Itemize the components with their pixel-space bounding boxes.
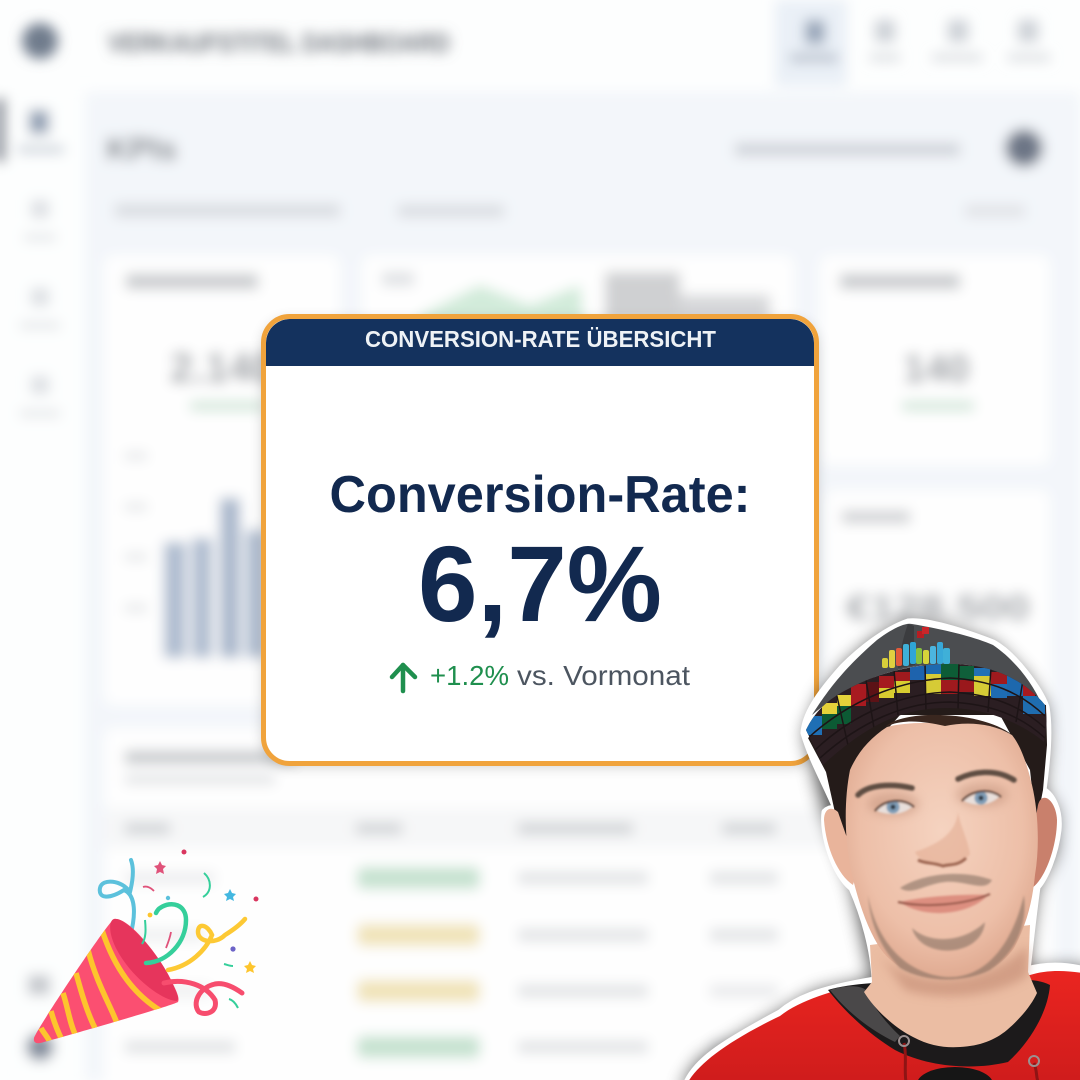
card: conversion-rate overview bbox=[263, 316, 817, 766]
confetti bbox=[142, 850, 258, 1008]
change versus previous month: vs. Vormonat bbox=[517, 660, 690, 691]
nose bbox=[915, 812, 970, 866]
card header bar bbox=[266, 319, 814, 366]
hairline bbox=[885, 715, 1012, 735]
green streamer bbox=[146, 904, 186, 963]
big number: 6,7% bbox=[418, 523, 662, 644]
neck bbox=[864, 925, 1037, 1047]
stubble bbox=[868, 874, 1025, 980]
KPI card: right top: 140 bbox=[903, 347, 970, 391]
brim coloured blocks bbox=[806, 664, 1045, 758]
filter row bbox=[115, 204, 1025, 217]
KPI card: left: 2.140 bbox=[170, 344, 275, 391]
hoodie drawstrings bbox=[904, 1043, 1038, 1080]
ears bbox=[824, 798, 1057, 888]
table panel bbox=[104, 728, 1054, 1080]
top navigation bar: VERKAUFSTITEL DASHBOARD bbox=[108, 28, 450, 58]
eyebrows bbox=[858, 772, 1014, 795]
face bbox=[846, 723, 1038, 980]
eyes bbox=[875, 791, 1001, 814]
cone bbox=[34, 919, 179, 1043]
top navigation bar bbox=[22, 0, 1050, 86]
portrait cut-out illustration bbox=[680, 622, 1080, 1080]
change versus previous month bbox=[430, 660, 690, 691]
page header row bbox=[106, 129, 1043, 167]
microphone bbox=[917, 1067, 993, 1080]
KPI card: middle with area chart bbox=[362, 255, 794, 335]
sidebar bbox=[0, 92, 82, 1080]
portrait shadow bbox=[680, 622, 1080, 1080]
blue streamer bbox=[100, 860, 134, 937]
yellow streamer bbox=[168, 919, 245, 970]
icon: green up arrow bbox=[392, 665, 415, 691]
KPI card: left bbox=[104, 255, 340, 705]
KPI card: right bottom bbox=[825, 490, 1050, 705]
KPI card: right bottom: €128.500 bbox=[846, 587, 1030, 628]
hair and cap underside bbox=[808, 690, 1047, 855]
hoodie bbox=[688, 971, 1080, 1080]
page header row: KPIs bbox=[106, 131, 177, 167]
white outline bbox=[686, 622, 1080, 1080]
KPI card: right top bbox=[820, 255, 1050, 465]
red streamer bbox=[164, 981, 242, 1014]
cap brim bbox=[806, 664, 1047, 765]
change versus previous month: +1.2% bbox=[430, 660, 509, 691]
cap tetris emblem bbox=[882, 627, 950, 668]
mouth bbox=[898, 894, 990, 913]
cap crown bbox=[812, 624, 1045, 715]
card header bar: CONVERSION-RATE ÜBERSICHT bbox=[365, 326, 716, 352]
eye sockets bbox=[867, 783, 1008, 816]
heading: conversion-rate: Conversion-Rate: bbox=[330, 466, 750, 524]
icon: party popper bbox=[34, 850, 258, 1043]
t-shirt and inner hood bbox=[828, 980, 1050, 1066]
